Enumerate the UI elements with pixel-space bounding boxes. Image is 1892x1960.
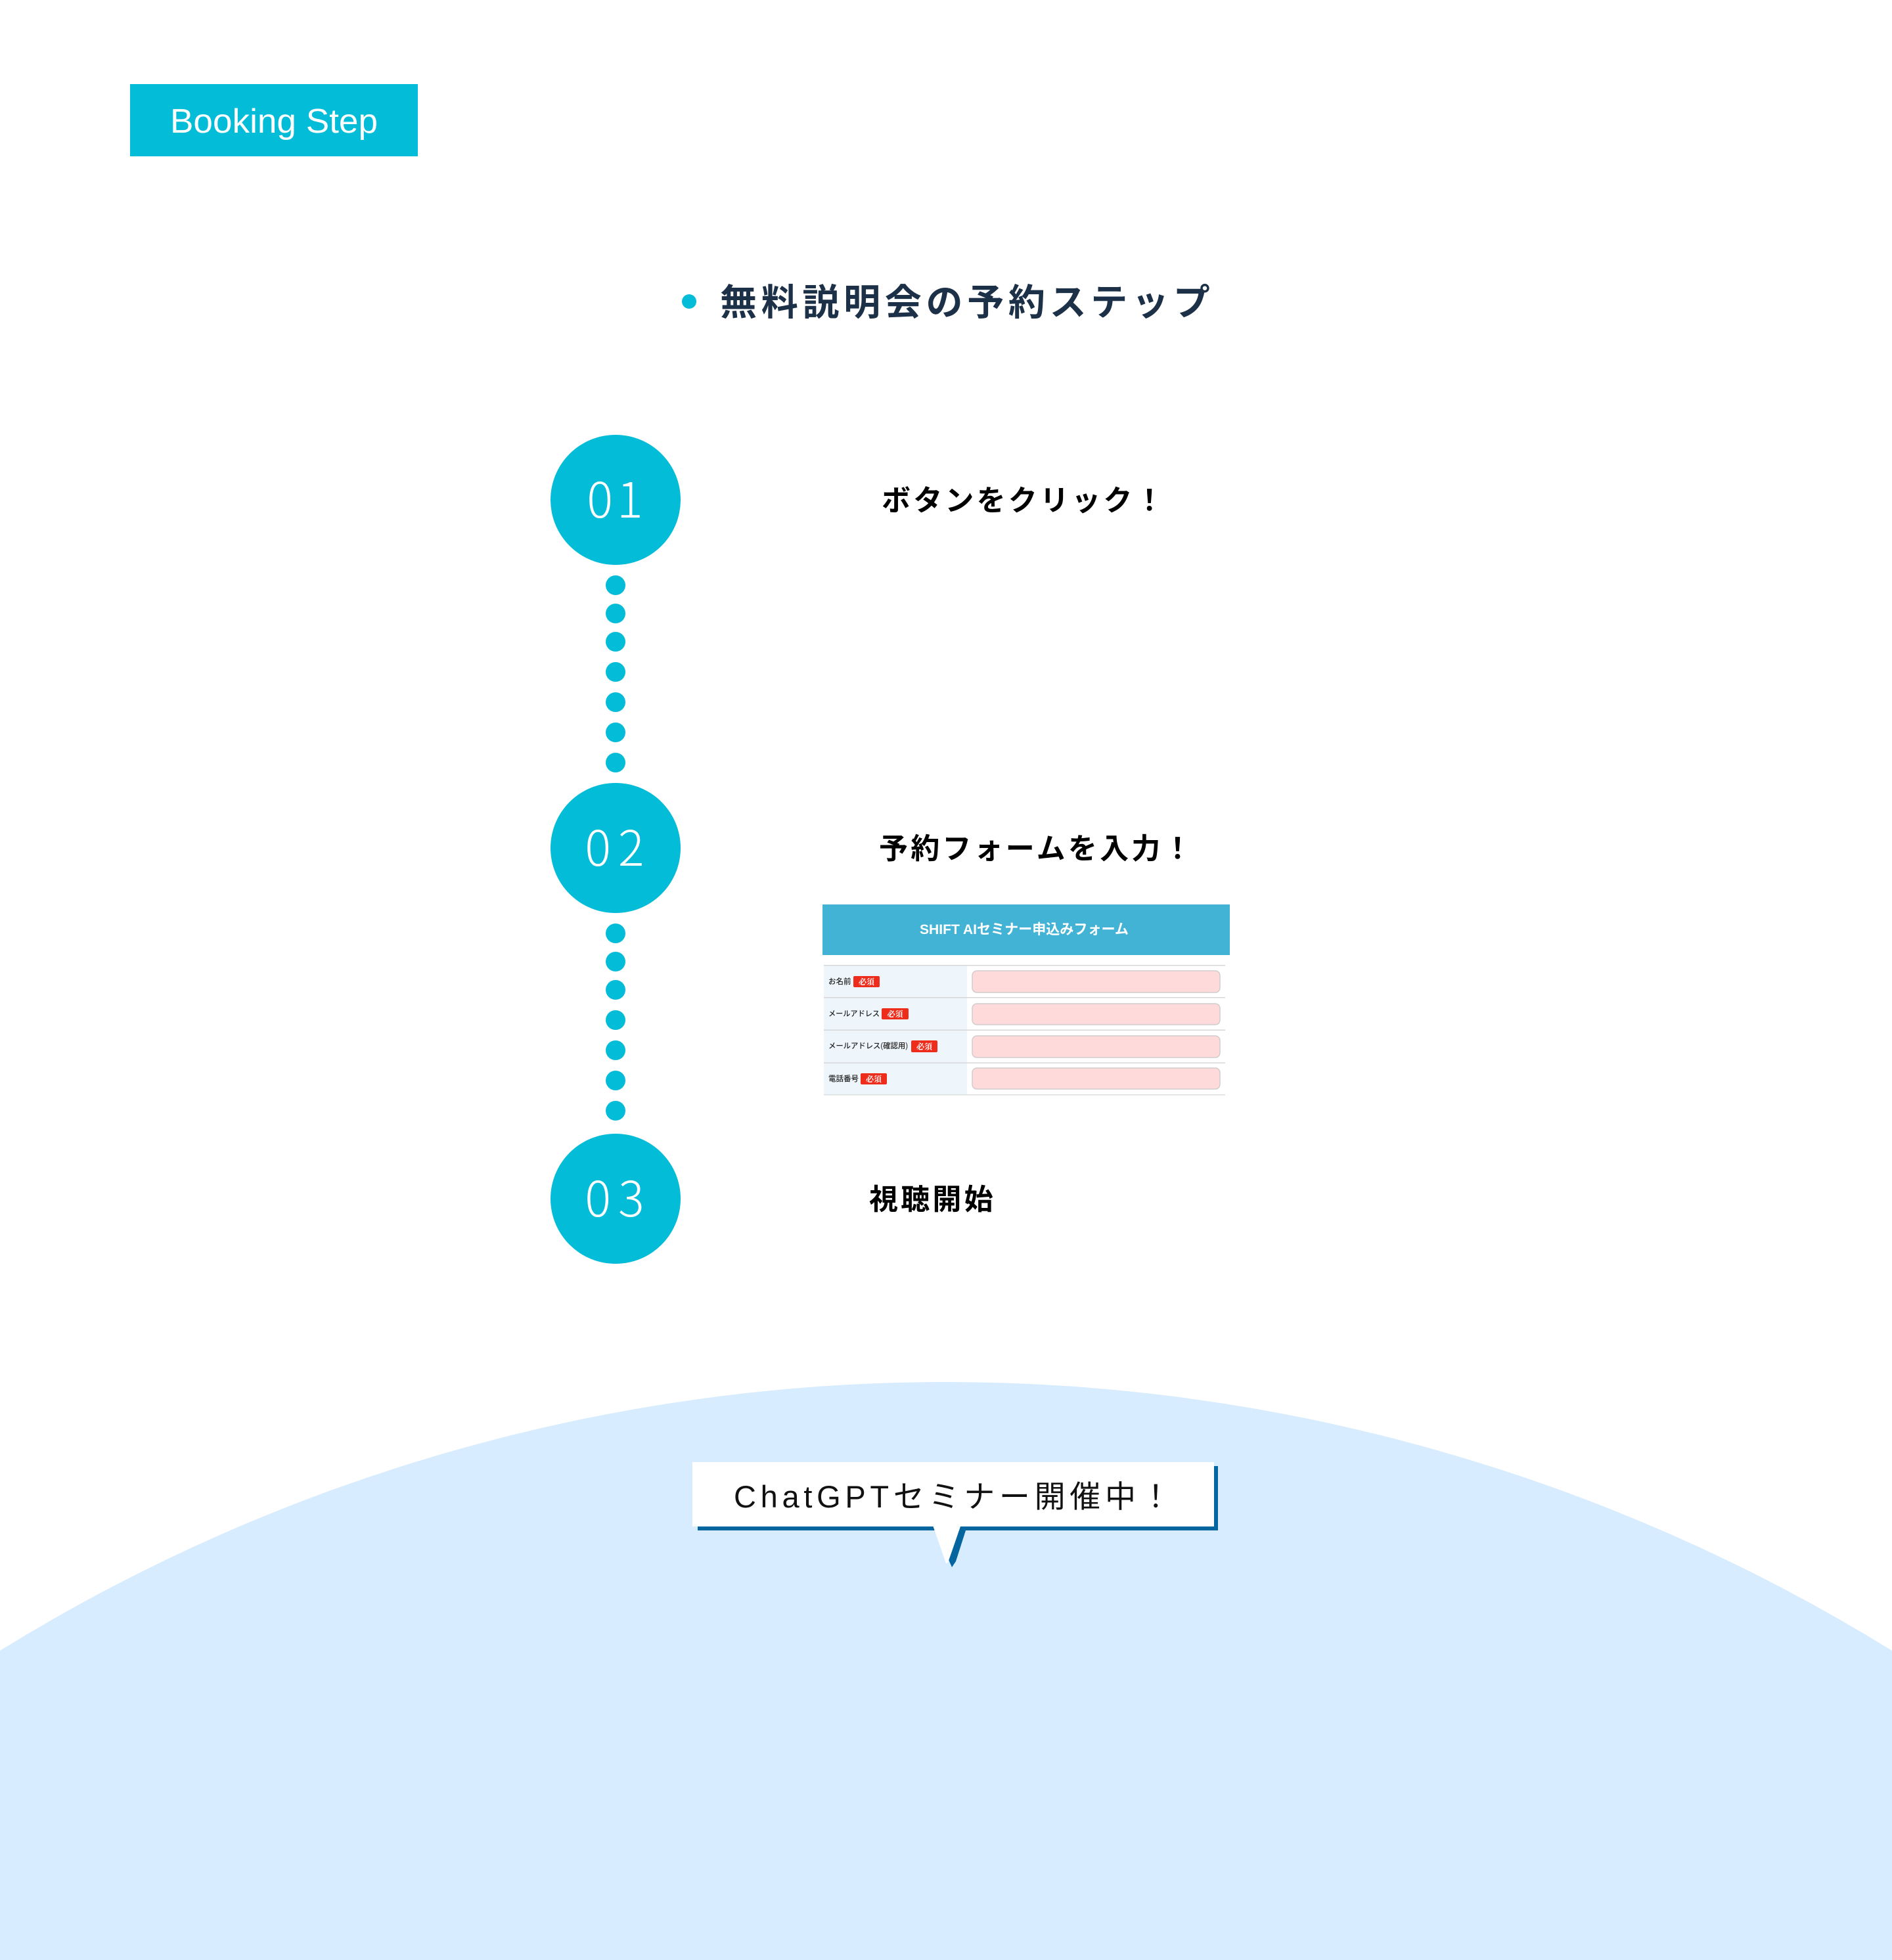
step 1 number: 01: [587, 462, 647, 532]
step 3 number: 03: [585, 1161, 652, 1231]
step 1 text: ボタンをクリック！: [882, 485, 1167, 517]
badge: Booking Step: [130, 84, 418, 156]
form header: [822, 904, 1230, 955]
form row: email: [824, 997, 1225, 1030]
step 2 text: 予約フォームを入力！: [879, 833, 1195, 865]
speech bubble: [692, 1462, 1218, 1567]
form row: name: 必須: [859, 977, 875, 987]
form row: email: メールアドレス: [828, 1010, 880, 1018]
step 3 text: 視聴開始: [869, 1184, 996, 1216]
bubble text: ChatGPTセミナー開催中！: [734, 1479, 1175, 1514]
bubble body: [692, 1462, 1214, 1563]
step 1 number: [551, 435, 681, 565]
form row: phone: 必須: [866, 1074, 882, 1084]
form row: phone: 電話番号: [828, 1075, 859, 1083]
badge: Booking Step: Booking Step: [170, 102, 378, 141]
dots between step 1 and 2: [606, 575, 625, 772]
title: 無料説明会の予約ステップ: [720, 282, 1214, 323]
step 3 number: [551, 1134, 681, 1264]
form row: phone: [824, 1063, 1225, 1096]
form row: name: お名前: [828, 977, 851, 986]
form row: email: 必須: [887, 1009, 903, 1019]
background arc: [0, 1382, 1892, 1960]
timeline: [551, 435, 681, 1264]
form row: name: [824, 965, 1225, 998]
dots between step 2 and 3: [606, 924, 625, 1121]
form header: SHIFT AIセミナー申込みフォーム: [920, 922, 1129, 937]
bubble shadow: [698, 1466, 1218, 1567]
step 2 number: [551, 783, 681, 913]
form row: email confirm: 必須: [916, 1042, 933, 1051]
form row: email confirm: メールアドレス(確認用): [828, 1041, 908, 1050]
form screenshot: [822, 904, 1230, 1096]
form row: email confirm: [824, 1030, 1225, 1063]
step 2 number: 02: [585, 810, 652, 880]
